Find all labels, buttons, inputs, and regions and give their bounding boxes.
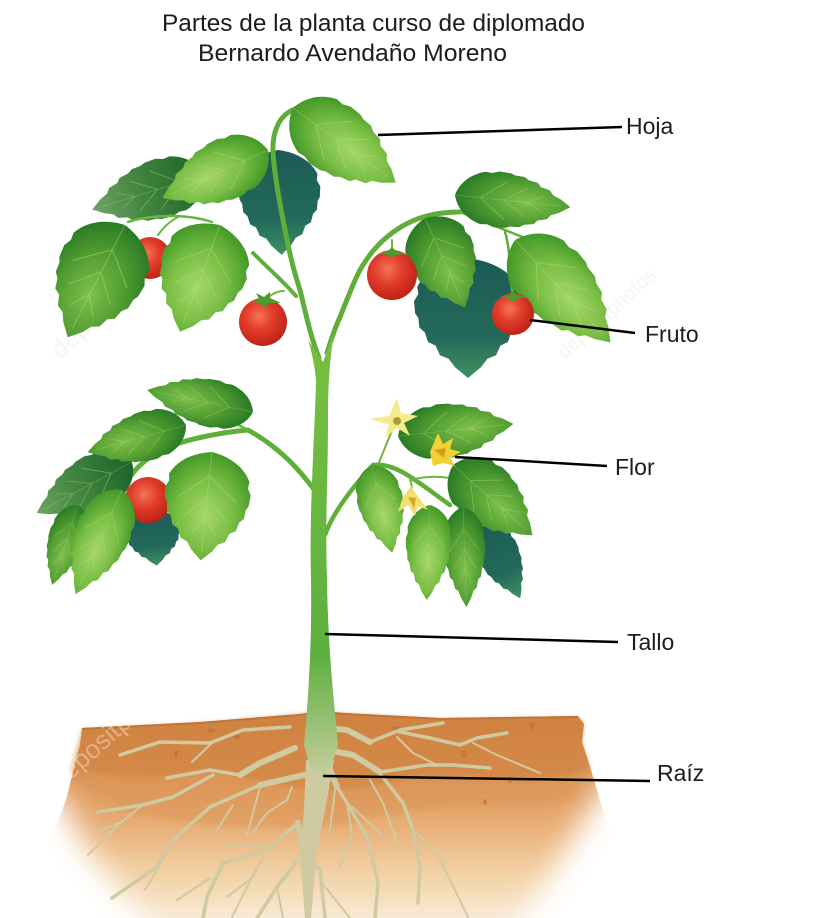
- tomato: labelled fruit: [492, 291, 534, 335]
- label: raiz: Raíz: [657, 760, 704, 786]
- soil: [0, 664, 825, 918]
- upper right leaves: [394, 167, 638, 368]
- soil: depositphotos: [44, 664, 184, 794]
- title: Bernardo Avendaño Moreno: [198, 40, 507, 67]
- upper left leaves: [28, 80, 416, 358]
- tomato group behind leaves: [125, 237, 171, 523]
- label: hoja: Hoja: [626, 113, 674, 139]
- label: tallo: Tallo: [627, 629, 674, 655]
- line: tallo: [325, 634, 618, 642]
- flower: labelled bloom: [430, 433, 461, 466]
- flower: open star: [370, 398, 418, 438]
- line: raiz: [323, 776, 650, 781]
- label: fruto: Fruto: [645, 321, 699, 347]
- tomatoes: [239, 247, 534, 346]
- labels: [615, 113, 704, 786]
- tomato: right of stem: [367, 247, 417, 300]
- trunk: [304, 332, 338, 779]
- lower right leaves: [350, 397, 553, 608]
- line: flor: [455, 457, 607, 466]
- stock watermark: [44, 234, 661, 364]
- pointer lines: [323, 127, 650, 781]
- title: [162, 10, 585, 67]
- line: hoja: [378, 127, 622, 135]
- main stem and branches: [128, 108, 525, 535]
- flowers: [370, 398, 461, 516]
- title: Partes de la planta curso de diplomado: [162, 10, 585, 37]
- roots: [88, 723, 540, 918]
- stock watermark: depositphotos: [554, 264, 661, 364]
- label: flor: Flor: [615, 454, 655, 480]
- flower: lower bud: [398, 486, 428, 516]
- stock watermark: depositphotos: [44, 234, 184, 364]
- plant foliage and stem: [24, 80, 638, 779]
- tomato: hanging centre: [239, 292, 287, 346]
- taproot: [300, 760, 334, 918]
- back leaves: [83, 146, 539, 608]
- line: fruto: [530, 320, 635, 333]
- lower left leaves: [24, 367, 258, 605]
